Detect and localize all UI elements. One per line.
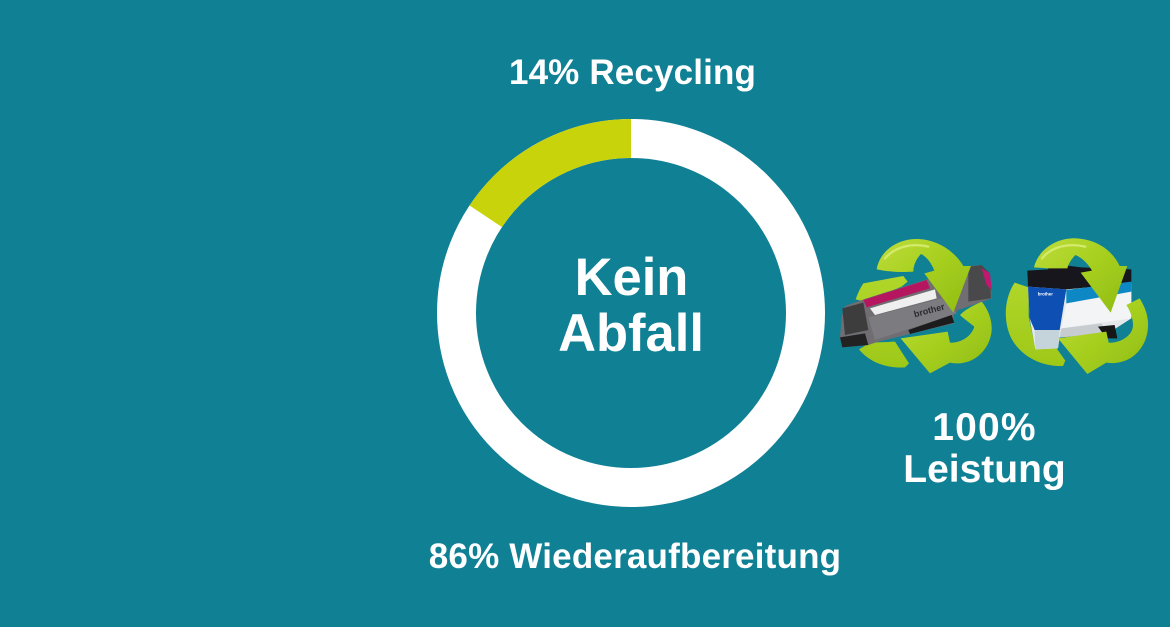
segment: 86% white <box>456 138 806 488</box>
lower left arrow <box>856 276 909 367</box>
lower right arrow <box>1058 298 1148 374</box>
lower right arrow <box>901 302 992 373</box>
arrow highlight <box>1042 245 1085 258</box>
cartridge base <box>1028 282 1131 349</box>
icon: ink cartridge with recycling arrows <box>1006 238 1148 374</box>
heading: recycling share: 14% Recycling <box>509 53 756 92</box>
toner body <box>840 265 992 347</box>
brand text: brother <box>913 301 946 319</box>
cartridge body <box>1027 263 1131 289</box>
segment: 14% lime <box>486 138 631 216</box>
label: remanufacturing share: 86% Wiederaufbereitung <box>429 537 841 576</box>
donut chart <box>456 138 806 488</box>
lower left arrow <box>1006 283 1065 366</box>
label: performance: 100% <box>932 406 1037 449</box>
center title: Abfall <box>558 304 704 363</box>
arrow highlight <box>885 245 928 258</box>
brand text: brother <box>1038 291 1053 296</box>
top arrow <box>1034 238 1127 313</box>
icon: toner cartridge with recycling arrows <box>840 239 992 373</box>
top arrow <box>877 239 971 313</box>
label: performance: Leistung <box>903 448 1066 491</box>
center title: Kein <box>575 248 688 307</box>
